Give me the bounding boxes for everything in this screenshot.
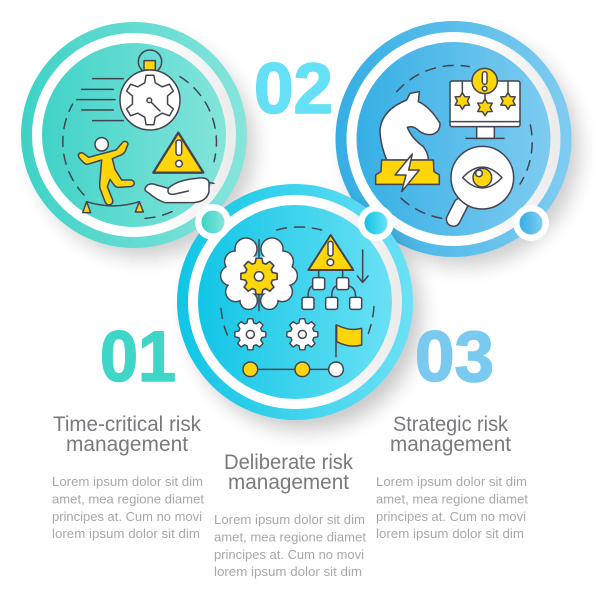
body text 03: principes at. Cum no movi bbox=[376, 509, 526, 524]
number 02: 02 bbox=[254, 50, 333, 129]
heading: strategic risk management: Strategic risk bbox=[393, 413, 508, 436]
icon: stopwatch bbox=[120, 50, 180, 130]
icon: timeline with flag bbox=[243, 325, 362, 377]
body text 02: lorem ipsum dolor sit dim bbox=[214, 564, 362, 579]
icons: time-critical risk bbox=[63, 50, 216, 218]
heading: strategic risk management bbox=[390, 413, 511, 456]
heading: time-critical risk management: management bbox=[66, 433, 188, 456]
icon: chess knight bbox=[376, 92, 440, 192]
panel: strategic circle bbox=[336, 21, 579, 266]
connector dot cyan bbox=[358, 205, 394, 241]
body text 03: Lorem ipsum dolor sit dim bbox=[376, 474, 527, 489]
body text 02: principes at. Cum no movi bbox=[214, 547, 364, 562]
heading: strategic risk management: management bbox=[390, 433, 511, 456]
icon: speed lines bbox=[77, 79, 123, 121]
body text 01: Lorem ipsum dolor sit dim bbox=[52, 474, 203, 489]
icon: warning in hand bbox=[145, 133, 214, 203]
icons: strategic risk bbox=[376, 65, 532, 219]
icon: magnifier with eye bbox=[451, 146, 514, 219]
heading: deliberate risk management: Deliberate risk bbox=[224, 451, 353, 474]
icon: warning with decision tree bbox=[302, 235, 362, 309]
icons: deliberate risk bbox=[221, 227, 374, 377]
heading: time-critical risk management bbox=[53, 413, 201, 456]
number 03: 03 bbox=[415, 318, 494, 397]
panel: deliberate circle bbox=[177, 184, 421, 430]
heading: deliberate risk management bbox=[224, 451, 353, 494]
heading: deliberate risk management: management bbox=[228, 471, 349, 494]
body text 03 bbox=[376, 474, 528, 541]
number 01: 01 bbox=[100, 318, 176, 397]
icon: falling person on tightrope bbox=[78, 138, 143, 213]
icon: brain with gear bbox=[221, 238, 297, 311]
body text 03: lorem ipsum dolor sit dim bbox=[376, 526, 524, 541]
body text 01: lorem ipsum dolor sit dim bbox=[52, 526, 200, 541]
body text 01 bbox=[52, 474, 204, 541]
icon: small gear right bbox=[287, 319, 318, 350]
panel: time-critical circle bbox=[21, 22, 254, 257]
body text 01: amet, mea regione diamet bbox=[52, 492, 204, 506]
body text 01: principes at. Cum no movi bbox=[52, 509, 202, 524]
body text 02 bbox=[214, 512, 366, 579]
connector dot teal bbox=[195, 204, 231, 240]
body text 02: amet, mea regione diamet bbox=[214, 530, 366, 544]
icon: small gear left bbox=[235, 319, 266, 350]
icon: monitor with alert bbox=[450, 68, 520, 138]
heading: time-critical risk management: Time-critical risk bbox=[53, 413, 201, 436]
connector dot blue bbox=[513, 205, 549, 241]
body text 02: Lorem ipsum dolor sit dim bbox=[214, 512, 365, 527]
body text 03: amet, mea regione diamet bbox=[376, 492, 528, 506]
icon: down arrow bbox=[357, 250, 368, 282]
